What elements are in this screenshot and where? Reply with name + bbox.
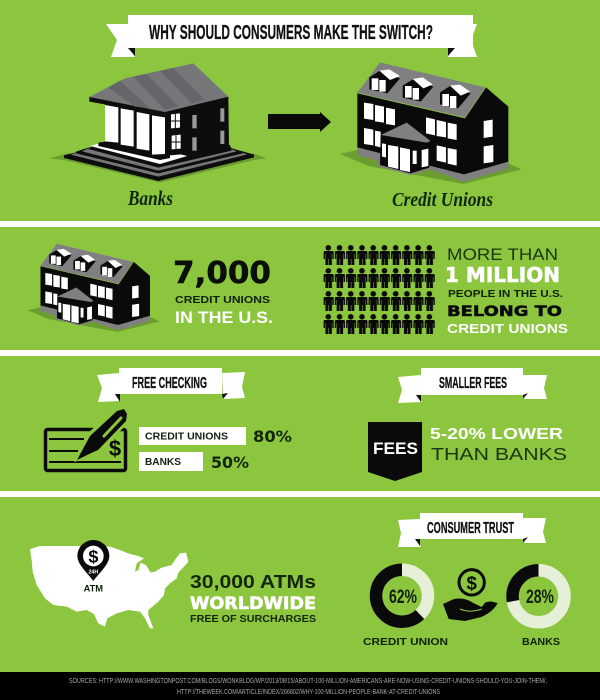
panel: atms: [30, 540, 316, 628]
panel: consumer trust: [363, 513, 564, 648]
footer: sources: HTTP://THEWEEK.COM/ARTICLE/INDEX/266802/WHY-100-MILLION-PEOPLE-BANK-AT-CREDIT-UNIONS: [177, 687, 440, 696]
label: credit union: CREDIT UNION: [363, 636, 448, 648]
banner: free checking: [97, 368, 245, 402]
bar: credit unions: CREDIT UNIONS: [145, 432, 228, 442]
chart: credit union donut 62%: 62%: [389, 587, 417, 608]
icon: bank building: [50, 63, 267, 183]
stat: 1 million members: [445, 246, 568, 336]
icon: hand with coin: $: [466, 572, 477, 593]
text: 5-20% lower than banks: THAN BANKS: [431, 444, 567, 464]
text: 5-20% lower than banks: [430, 426, 567, 464]
banner: consumer trust: [398, 513, 546, 547]
footer: sources: [0, 672, 600, 700]
icon: grid of people: [323, 245, 435, 337]
stat: 7,000 credit unions: CREDIT UNIONS: [175, 295, 270, 306]
icon: fees tag: [368, 422, 422, 481]
chart: credit union donut 62%: [376, 570, 428, 622]
stat: 30,000 atms: FREE OF SURCHARGES: [190, 614, 316, 625]
icon: us map with atm pin: [30, 540, 188, 628]
stat: 7,000 credit unions: IN THE U.S.: [175, 308, 273, 327]
icon: fees tag: FEES: [373, 439, 418, 458]
icon: check and pen: $: [109, 436, 121, 461]
banner: smaller fees: [398, 368, 547, 403]
bar: credit unions: 80%: [253, 427, 292, 446]
icon: check and pen: [46, 406, 130, 470]
stat: 1 million members: MORE THAN: [447, 246, 558, 264]
icon: us map with atm pin: 24H: [88, 569, 98, 575]
title banner: [106, 15, 477, 57]
banner: free checking: FREE CHECKING: [132, 375, 207, 392]
panel: free checking: [46, 368, 292, 472]
arrow: [268, 112, 331, 132]
panel: why switch: [50, 15, 522, 211]
bar: banks: [139, 452, 249, 472]
banner: consumer trust: CONSUMER TRUST: [427, 520, 514, 537]
panel: credit union stats: [28, 244, 568, 337]
stat: 7,000 credit unions: [173, 256, 273, 327]
icon: us map with atm pin: ATM: [84, 584, 103, 594]
text: 5-20% lower than banks: 5-20% LOWER: [430, 426, 563, 443]
stat: 30,000 atms: WORLDWIDE: [190, 594, 316, 613]
panel: smaller fees: [368, 368, 567, 481]
chart: banks donut 28%: 28%: [526, 587, 554, 608]
bar: credit unions: [139, 427, 292, 446]
chart: banks donut 28%: [512, 570, 564, 622]
stat: 30,000 atms: 30,000 ATMs: [190, 572, 316, 592]
bar: banks: BANKS: [145, 457, 181, 468]
stat: 7,000 credit unions: 7,000: [173, 256, 271, 291]
stat: 1 million members: CREDIT UNIONS: [447, 321, 568, 336]
stat: 30,000 atms: [190, 572, 316, 625]
label: banks: Banks: [127, 186, 173, 210]
stat: 1 million members: PEOPLE IN THE U.S.: [448, 289, 563, 300]
banner: smaller fees: SMALLER FEES: [439, 375, 507, 392]
stat: 1 million members: 1 MILLION: [445, 263, 560, 287]
icon: credit union building: [340, 62, 522, 184]
icon: us map with atm pin: $: [88, 546, 98, 566]
icon: small credit union building: [28, 244, 160, 332]
icon: hand with coin: [443, 570, 498, 621]
bar: banks: 50%: [211, 453, 249, 472]
label: credit unions: Credit Unions: [392, 189, 493, 211]
label: banks: BANKS: [522, 636, 560, 648]
stat: 1 million members: BELONG TO: [447, 304, 562, 320]
